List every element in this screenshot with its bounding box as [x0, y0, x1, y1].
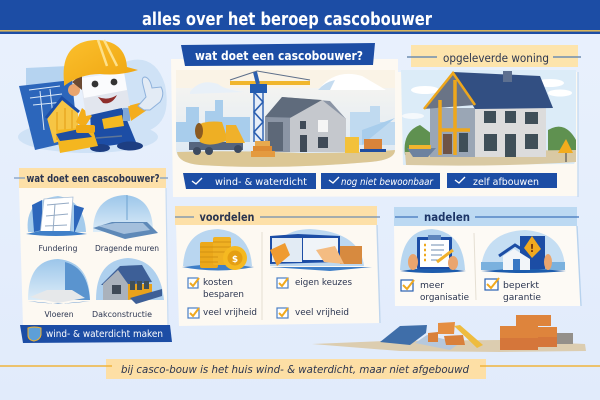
icon: coins: [182, 229, 254, 270]
item: kosten besparen: [188, 278, 244, 300]
icon: house warning: [481, 230, 566, 273]
construction scene: [176, 70, 395, 167]
item: meer organisatie: [401, 280, 469, 303]
crane: [230, 71, 310, 143]
text: vloeren: Vloeren: [44, 310, 74, 319]
house: [430, 108, 546, 157]
banner: wat doet een cascobouwer: wat doet een cascobouwer?: [195, 49, 363, 63]
heading: voordelen: voordelen: [200, 210, 254, 224]
house scene: [401, 70, 576, 166]
callout: bottom summary: [0, 359, 600, 379]
text: fundering: Fundering: [38, 244, 78, 253]
label: nog niet bewoonbaar: nog niet bewoonbaar: [341, 177, 434, 188]
label: wind- & waterdicht: wind- & waterdicht: [215, 177, 307, 188]
item: kosten besparen: kosten: [203, 278, 233, 288]
toolbox: [56, 125, 122, 153]
text: dragende muren: Dragende muren: [95, 244, 159, 253]
banner left: [14, 168, 168, 188]
item: veel vrijheid 2: veel vrijheid: [295, 308, 349, 318]
heading: nadelen: nadelen: [424, 210, 470, 224]
blueprint: [19, 66, 78, 150]
title: alles over het beroep cascobouwer: [142, 9, 432, 30]
bricks: [251, 151, 275, 157]
body overalls: [90, 108, 136, 148]
thumbs up hand: [138, 77, 163, 110]
icon: dragende muren: [93, 195, 158, 239]
item: beperkt garantie: garantie: [503, 293, 541, 303]
icon: house warning: !: [529, 242, 535, 255]
panel: voordelen: [175, 206, 380, 326]
icon: clipboard: [400, 229, 466, 273]
item: beperkt garantie: beperkt: [503, 281, 539, 291]
icon: shield: [28, 327, 41, 341]
footer banner: wind- & waterdicht maken: [46, 329, 163, 340]
item: beperkt garantie: [485, 278, 541, 303]
unfinished house: [265, 97, 346, 152]
icon: dakconstructie: [96, 258, 164, 304]
item: veel vrijheid: veel vrijheid: [203, 308, 257, 318]
label: zelf afbouwen: zelf afbouwen: [473, 177, 539, 188]
banner: opgeleverde woning: [407, 45, 581, 67]
mascot illustration: [18, 40, 167, 153]
illustration: building materials: [312, 315, 586, 352]
banner: opgeleverde woning: opgeleverde woning: [443, 51, 549, 65]
panel: wat doet een cascobouwer (left): [14, 168, 172, 343]
heading: nadelen: [394, 207, 579, 226]
icon: fundering: [26, 196, 87, 236]
city skyline: [176, 100, 250, 142]
warning sign: [558, 139, 573, 153]
helmet: [64, 40, 138, 86]
icon: coins: $: [232, 255, 238, 265]
panel: wat doet een cascobouwer (top): [171, 43, 578, 197]
header band: [0, 0, 600, 34]
mixer truck: [189, 122, 245, 155]
icon: planning hands: [270, 229, 372, 271]
small house model: [46, 98, 79, 143]
label: zelf afbouwen: [447, 173, 557, 188]
item: meer organisatie: meer: [420, 281, 444, 291]
wheelbarrow: [407, 148, 436, 157]
text: dakconstructie: Dakconstructie: [92, 310, 152, 319]
ground: [177, 150, 395, 167]
footer banner: [20, 325, 172, 343]
head: [80, 72, 130, 116]
boots: [117, 142, 143, 150]
label: nog niet bewoonbaar: [321, 173, 440, 189]
item: kosten besparen: besparen: [203, 290, 244, 300]
panel: nadelen: [394, 207, 581, 306]
label: wind- & waterdicht: [183, 173, 316, 189]
heading: voordelen: [175, 206, 380, 225]
icon: vloeren: [28, 259, 90, 304]
item: meer organisatie: organisatie: [420, 293, 469, 303]
banner left: wat doet een cascobouwer?: [26, 173, 160, 185]
panel: opgeleverde woning: [401, 45, 581, 166]
callout: bottom summary: bij casco-bouw is het huis wind- & waterdicht, maar niet afgebouwd: [121, 364, 469, 376]
banner: wat doet een cascobouwer: [181, 43, 375, 66]
item: eigen keuzes: eigen keuzes: [295, 278, 352, 288]
